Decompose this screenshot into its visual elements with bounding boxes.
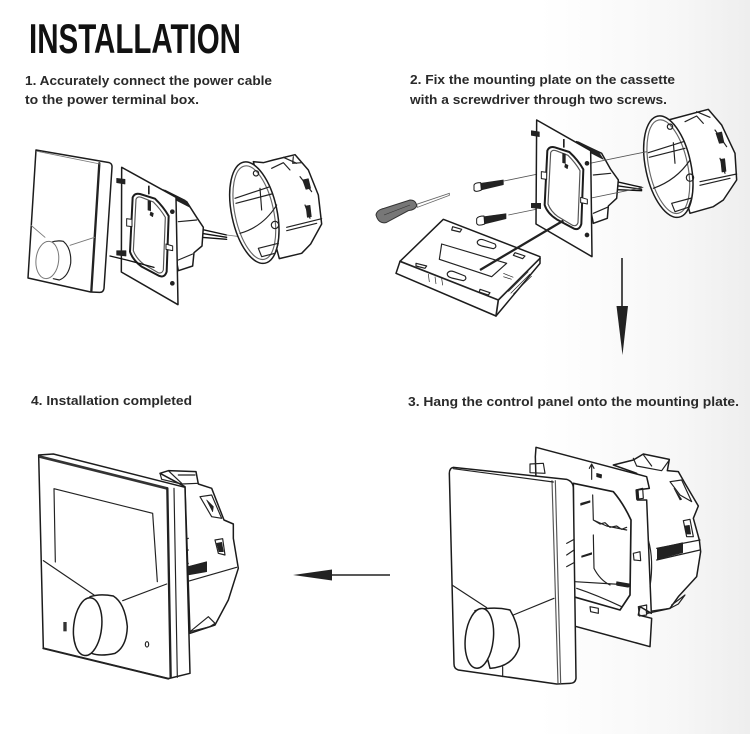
control panel xyxy=(28,150,112,292)
screwdriver shaft through base xyxy=(480,221,563,270)
mounting plate xyxy=(530,447,652,647)
mounting plate xyxy=(110,167,178,305)
step 1 illustration: exploded view xyxy=(28,150,322,305)
step 3 instructions: 3. Hang the control panel onto the mounting plate. xyxy=(408,394,739,409)
step 4 illustration: completed device xyxy=(39,454,238,679)
wall box xyxy=(635,109,737,222)
mounting plate box xyxy=(163,190,203,271)
knob xyxy=(462,607,519,670)
indicator: power xyxy=(145,642,149,647)
step 1 instructions: to the power terminal box. xyxy=(25,92,199,107)
screw guide lines xyxy=(504,152,647,215)
wall box body xyxy=(253,155,322,259)
title: INSTALLATION xyxy=(29,15,241,62)
wires xyxy=(617,182,642,191)
rear housing xyxy=(613,454,701,613)
front panel xyxy=(39,454,190,679)
wall box ring xyxy=(221,157,287,268)
mounting base xyxy=(396,219,540,316)
step 1 instructions: 1. Accurately connect the power cable xyxy=(25,73,272,88)
junction wiring xyxy=(201,207,277,239)
knob xyxy=(71,595,127,657)
step 3 illustration: hanging the panel xyxy=(449,447,701,684)
control panel xyxy=(449,467,576,684)
plate rear housing xyxy=(577,142,618,223)
step 4 instructions: 4. Installation completed xyxy=(31,393,192,408)
arrow: down xyxy=(616,258,628,355)
step 2 illustration: fixing the plate xyxy=(376,109,737,316)
arrow: left xyxy=(293,570,390,580)
mounting plate xyxy=(531,120,592,257)
step 2 instructions xyxy=(409,72,675,107)
indicator: lock xyxy=(63,622,67,631)
step 1 instructions xyxy=(25,73,272,107)
lower screw xyxy=(477,214,506,225)
screwdriver xyxy=(376,193,449,223)
rear housing xyxy=(160,471,238,633)
step 2 instructions: 2. Fix the mounting plate on the cassette xyxy=(410,72,675,87)
step 2 instructions: with a screwdriver through two screws. xyxy=(409,92,667,107)
upper screw xyxy=(474,180,503,191)
